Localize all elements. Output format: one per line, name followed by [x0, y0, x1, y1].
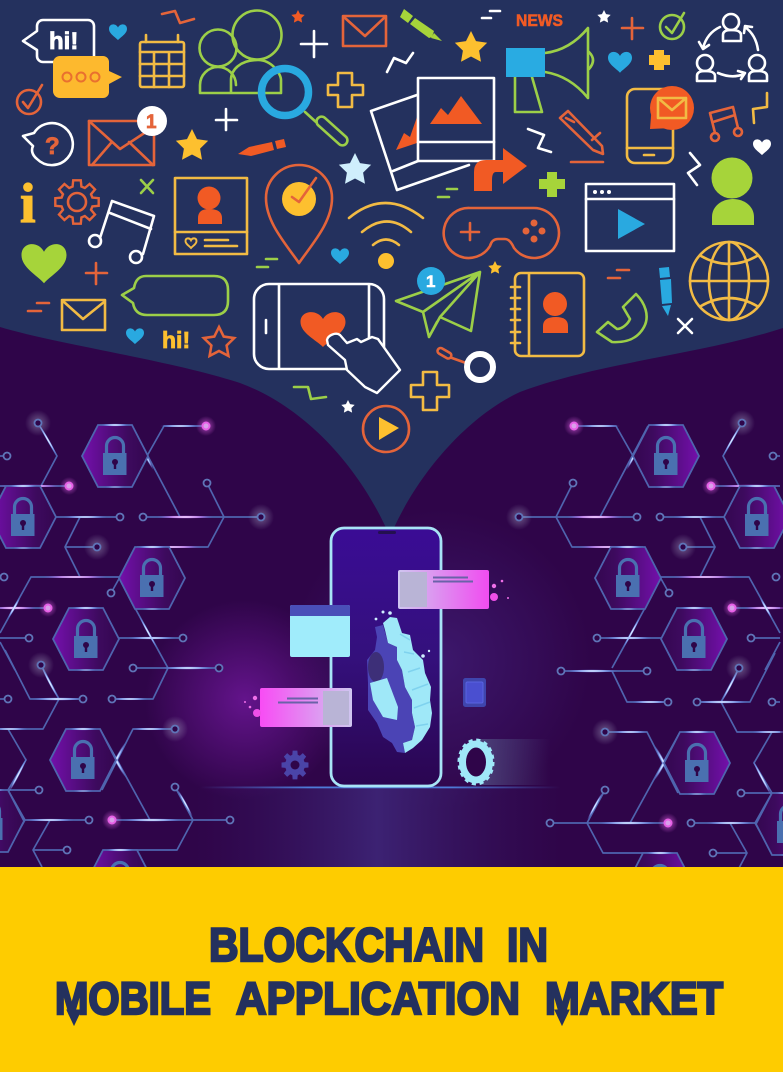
background: soft purple glow left of phone: [145, 600, 345, 800]
icon: blue pencil: [659, 267, 672, 316]
title text: MOBILE: [55, 973, 211, 1024]
left circuit network, lower: [0, 650, 234, 913]
icon: orange crayon: [238, 139, 286, 156]
message card right: [398, 570, 509, 609]
icon: back photo: [371, 95, 469, 190]
icon: green pencil: [400, 9, 442, 41]
icon: white bolt: [688, 153, 700, 185]
icon: light blue star: [339, 153, 371, 184]
icon: people cycle: [697, 14, 767, 81]
text: badge 1: 1: [146, 112, 157, 133]
phone notch: [378, 531, 396, 534]
indigo gear left: [282, 751, 308, 779]
icon: white x: [678, 319, 692, 333]
icon: white plus: [216, 109, 237, 130]
title text: IN: [507, 918, 548, 971]
small device: [463, 678, 486, 707]
floor line: [200, 786, 560, 788]
icon: video player window: [586, 184, 674, 251]
right hexagon lock 3: [595, 546, 661, 610]
background: soft indigo glow behind phone: [290, 510, 590, 810]
hexagon lock 5: [50, 728, 116, 792]
icon: phone receiver: [597, 294, 647, 342]
text: hi: hi!: [49, 28, 78, 55]
icon: green empty bubble: [122, 276, 228, 315]
icon: globe: [690, 242, 768, 320]
icon: yellow star: [176, 129, 208, 160]
icon: hi speech bubble: [23, 20, 94, 62]
hexagon lock 7, cut by banner: [87, 849, 153, 913]
background: lit floor: [195, 788, 560, 867]
icon: game controller: [444, 208, 559, 258]
icon: white zigzag: [387, 53, 413, 72]
right hexagon lock 5: [664, 731, 730, 795]
icon: blue magnifier: [262, 68, 349, 147]
right circuit network, lower: [546, 653, 783, 916]
icon: white plus 2: [301, 31, 327, 57]
icon: check circle orange: [17, 85, 42, 114]
right hexagon lock 1: [633, 424, 699, 488]
icon: white music note: [89, 201, 154, 263]
hand pointer: [327, 334, 400, 393]
gear on phone: [367, 610, 432, 753]
icon: calendar: [140, 35, 184, 87]
icon: green plus: [539, 172, 565, 197]
title text: BLOCKCHAIN: [209, 918, 484, 971]
text: badge 1 blue: 1: [426, 272, 435, 291]
hexagon lock 3: [119, 546, 185, 610]
icon: green dashes 2: [438, 189, 457, 197]
icon: green zigzag: [294, 387, 326, 399]
icon: green person: [712, 158, 754, 225]
icon: yellow chat bubble: [53, 56, 122, 98]
icon: yellow star 2: [455, 31, 487, 62]
icon: tablet touch with hand: [254, 284, 400, 393]
icon: music note orange: [710, 107, 742, 141]
title text: [55, 918, 723, 1025]
window card: [290, 605, 350, 657]
text: hi gold: hi!: [162, 327, 190, 353]
icon: small white star: [597, 10, 611, 23]
icon: notebook contact: [511, 273, 584, 356]
hexagon lock 2: [0, 485, 56, 549]
icon: orange mail top: [343, 16, 386, 46]
message card left: [244, 688, 352, 727]
title banner: [0, 867, 783, 1072]
icon: orange dashes: [28, 303, 49, 311]
icon: play button: [363, 406, 409, 452]
icon: orange plus: [622, 18, 643, 39]
title text: MARKET: [545, 973, 723, 1024]
icon: green heart: [22, 244, 66, 283]
icon: blue heart 3: [126, 328, 144, 344]
text: question mark: ?: [45, 133, 60, 160]
icon: question bubble: [23, 123, 73, 165]
left circuit network, upper: [0, 410, 274, 671]
icon: paper plane: [396, 267, 480, 337]
icon: orange zigzag: [162, 11, 194, 23]
hexagon lock 6, left edge: [0, 789, 24, 853]
icon: location pin: [266, 165, 332, 263]
text: news: NEWS: [516, 11, 563, 30]
icon: green people: [200, 10, 282, 93]
icon: orange pencil outline: [560, 111, 603, 162]
icon: white dashes: [482, 11, 500, 18]
icon: orange envelope with badge: [89, 106, 167, 165]
icon: profile card: [175, 178, 247, 254]
icon: yellow plus: [649, 50, 670, 70]
hexagon lock 1: [82, 424, 148, 488]
right hexagon lock 6, right edge: [756, 792, 783, 856]
icon: green check circle: [660, 13, 684, 39]
icon: small gold star: [488, 261, 502, 274]
icon: wifi: [349, 203, 423, 269]
right hexagon lock 7, cut by banner: [627, 852, 693, 916]
icon: yellow outlined plus 2: [411, 372, 449, 410]
icon: blue heart 4: [331, 248, 349, 264]
smartphone: [331, 528, 441, 786]
icon: gold envelope: [62, 300, 105, 330]
light beam behind gear: [480, 739, 550, 785]
icon: yellow corner zigzag: [753, 93, 767, 123]
icon: white heart: [753, 139, 771, 155]
icon: orange outlined star: [204, 327, 234, 356]
cyan gear right: [460, 740, 492, 784]
icon: yellow outlined plus: [328, 73, 363, 107]
right hexagon lock 2: [724, 485, 783, 549]
icon: small white star 2: [341, 400, 355, 413]
icon: blue heart: [109, 24, 127, 40]
icon: green dashes: [257, 259, 277, 267]
icon: blue heart 2: [608, 52, 632, 73]
right circuit network, upper: [506, 410, 783, 671]
icon: phone with message: [627, 86, 694, 163]
icon: small orange star: [291, 10, 305, 23]
icon: orange arrow: [474, 148, 527, 191]
icon: orange dashes 2: [608, 270, 629, 278]
hexagon lock 4: [53, 607, 119, 671]
right hexagon lock 4: [661, 607, 727, 671]
icon: white ring magnifier: [436, 347, 493, 380]
icon: info i: i: [20, 173, 36, 235]
icon: orange plus 2: [86, 263, 107, 284]
icon: news megaphone: [506, 11, 593, 112]
speech bubble shape holding the icons: [0, 0, 783, 530]
title text: APPLICATION: [236, 973, 520, 1024]
icon: white zigzag 2: [528, 129, 551, 152]
icon: front photo: [418, 78, 494, 161]
icon: orange gear: [55, 180, 99, 224]
icon: green x: [141, 180, 153, 193]
